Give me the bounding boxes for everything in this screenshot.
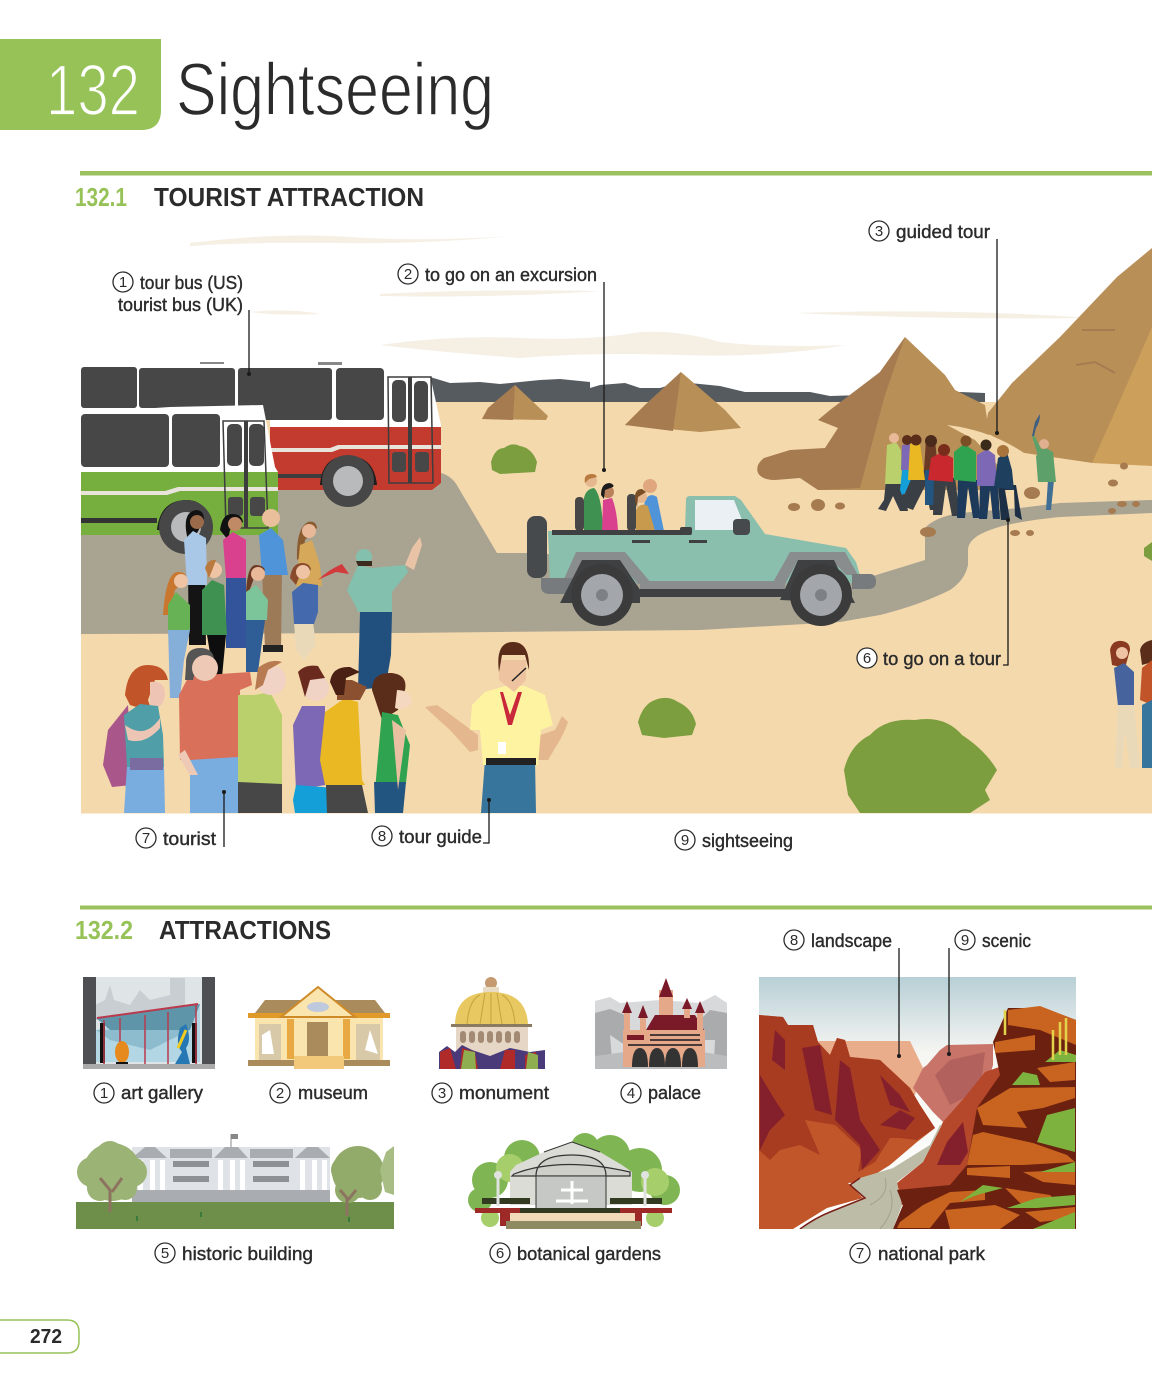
label: scenic: 9 bbox=[961, 932, 969, 949]
river bed and right slope bbox=[897, 1065, 1005, 1205]
label: to go on a tour: 6 bbox=[863, 650, 871, 667]
jeep with passengers bbox=[527, 474, 876, 626]
large centre mountain bbox=[757, 337, 1151, 490]
mint shirt girl bbox=[246, 565, 268, 672]
label: monument: 3 bbox=[438, 1085, 446, 1102]
tour guide bbox=[425, 642, 568, 813]
heading: 132.2 attractions bbox=[75, 915, 331, 945]
label: art gallery: 1 bbox=[100, 1085, 108, 1102]
right rock mass bbox=[893, 1008, 1076, 1229]
right edge tourists bbox=[1110, 640, 1152, 768]
mid-ground tourists bbox=[163, 509, 422, 698]
jeep passengers bbox=[575, 474, 664, 531]
label: tour guide: 8 bbox=[378, 828, 386, 845]
label: historic building: 5 bbox=[161, 1245, 169, 1262]
blue shirt woman bbox=[184, 510, 207, 645]
distant mesa bbox=[818, 1041, 923, 1095]
large right mountain bbox=[985, 248, 1152, 466]
label: tour bus: 1 bbox=[119, 274, 127, 291]
heading: 132.1 tourist attraction: 132.1 bbox=[75, 182, 127, 212]
label: national park: 7 bbox=[856, 1245, 864, 1262]
medium pyramid bbox=[625, 372, 741, 432]
label: landscape: landscape bbox=[811, 931, 892, 951]
label: guided tour: guided tour bbox=[896, 222, 990, 242]
label: to go on an excursion: to go on an excursion bbox=[425, 265, 597, 285]
label: palace: 4 bbox=[627, 1085, 635, 1102]
panel: tourist attraction scene bbox=[81, 235, 1152, 814]
label: guided tour: 3 bbox=[875, 223, 883, 240]
label: scenic: scenic bbox=[982, 931, 1031, 951]
road bbox=[81, 473, 1152, 634]
illustration: national park bbox=[759, 977, 1076, 1229]
green shirt man bbox=[238, 661, 286, 813]
distant tour group with guide bbox=[878, 414, 1056, 520]
tourist bus (green, front) bbox=[81, 405, 278, 554]
label: sightseeing: sightseeing bbox=[702, 831, 793, 851]
label: scenic bbox=[955, 930, 1031, 951]
red flag bbox=[318, 564, 349, 580]
man with cap pointing bbox=[347, 537, 422, 690]
illustration: art gallery bbox=[83, 977, 215, 1069]
left canyon wall bbox=[759, 1015, 935, 1229]
label: tourist: 7 bbox=[142, 830, 150, 847]
label: museum: 2 bbox=[276, 1085, 284, 1102]
illustration: museum bbox=[248, 987, 390, 1069]
distant skyline bbox=[430, 377, 985, 402]
label: palace bbox=[621, 1083, 701, 1103]
vegetation bbox=[960, 1050, 1076, 1229]
title: Sightseeing bbox=[176, 48, 494, 131]
tan shirt woman bbox=[296, 522, 322, 586]
label: botanical gardens: 6 bbox=[496, 1245, 504, 1262]
chapter number tab bbox=[0, 39, 161, 131]
bald man blue shirt bbox=[259, 509, 288, 652]
label: tourist: tourist bbox=[163, 829, 216, 849]
green top woman bbox=[372, 673, 412, 813]
illustration: palace bbox=[595, 978, 727, 1069]
chapter number tab: 132 bbox=[46, 51, 140, 131]
label: tour guide bbox=[372, 826, 482, 847]
sand ground bbox=[81, 402, 1152, 814]
rocks bbox=[788, 462, 1140, 537]
label: monument: monument bbox=[459, 1083, 549, 1103]
label: botanical gardens: botanical gardens bbox=[517, 1244, 661, 1264]
label: national park: national park bbox=[878, 1244, 986, 1264]
foreground tourists bbox=[103, 648, 412, 813]
yellow shirt man bbox=[320, 667, 368, 813]
coral shirt man bbox=[178, 648, 252, 813]
guide with paddle bbox=[1046, 482, 1054, 510]
leader lines: attractions bbox=[897, 948, 951, 1058]
purple shirt woman bbox=[293, 666, 329, 813]
heading: 132.2 attractions: 132.2 bbox=[75, 915, 133, 945]
river bbox=[800, 1125, 942, 1229]
label: museum: museum bbox=[298, 1083, 368, 1103]
illustration: botanical gardens bbox=[468, 1133, 680, 1229]
label: palace: palace bbox=[648, 1083, 701, 1103]
green shirt boy bbox=[202, 560, 227, 677]
label: to go on a tour: to go on a tour bbox=[883, 649, 1001, 669]
label: historic building: historic building bbox=[182, 1244, 313, 1264]
illustration: historic building bbox=[76, 1134, 394, 1229]
label: tour bus: tour bus (US) bbox=[140, 273, 243, 293]
tour bus (red, rear) bbox=[81, 362, 441, 507]
small pyramid bbox=[482, 385, 548, 420]
label: tour bus: tourist bus (UK) bbox=[118, 295, 243, 315]
back cliffs bbox=[913, 1044, 993, 1122]
page number: 272 bbox=[30, 1326, 62, 1348]
label: to go on an excursion: 2 bbox=[404, 266, 412, 283]
label: sightseeing: 9 bbox=[681, 832, 689, 849]
blue shirt girl bbox=[290, 563, 318, 660]
pink shirt woman bbox=[220, 514, 246, 648]
red-haired woman bbox=[103, 665, 168, 813]
label: art gallery: art gallery bbox=[121, 1083, 203, 1103]
heading: 132.1 tourist attraction: TOURIST ATTRACTION bbox=[154, 182, 424, 212]
page number bbox=[0, 1320, 79, 1353]
label: tour bus bbox=[113, 272, 243, 315]
label: landscape: 8 bbox=[790, 932, 798, 949]
bushes bbox=[491, 444, 1152, 813]
heading: 132.2 attractions: ATTRACTIONS bbox=[159, 915, 331, 945]
illustration: monument bbox=[439, 977, 545, 1069]
clouds bbox=[190, 235, 1090, 358]
label: tourist bbox=[136, 828, 216, 849]
label: tour guide: tour guide bbox=[399, 827, 482, 847]
green shirt girl bbox=[163, 572, 190, 698]
leader lines: tourist attraction bbox=[222, 239, 1010, 847]
